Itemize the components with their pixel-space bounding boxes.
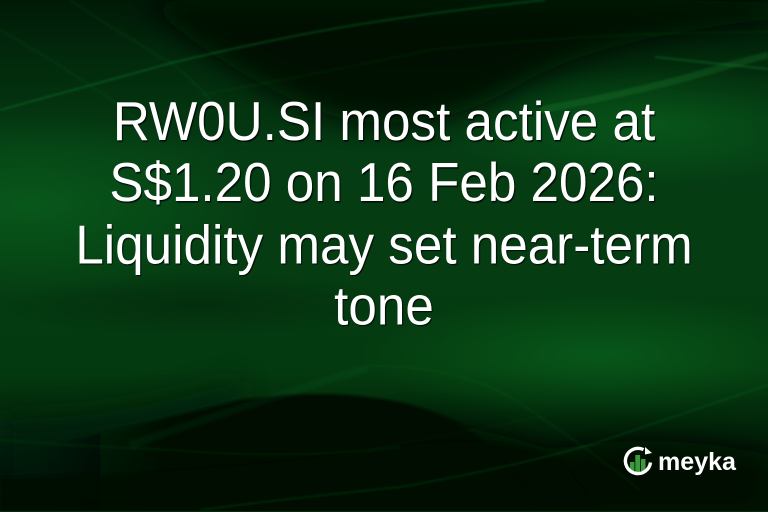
logo: meyka xyxy=(624,446,737,476)
icon: circular arrow with bars xyxy=(625,447,652,474)
title: RW0U.SI most active at xyxy=(113,91,655,152)
title: Liquidity may set near-term xyxy=(75,214,693,275)
title: S$1.20 on 16 Feb 2026: xyxy=(109,152,659,213)
title xyxy=(75,91,693,336)
bottom dark wave xyxy=(40,394,540,512)
wordmark: meyka xyxy=(658,448,737,476)
title: tone xyxy=(334,275,434,336)
